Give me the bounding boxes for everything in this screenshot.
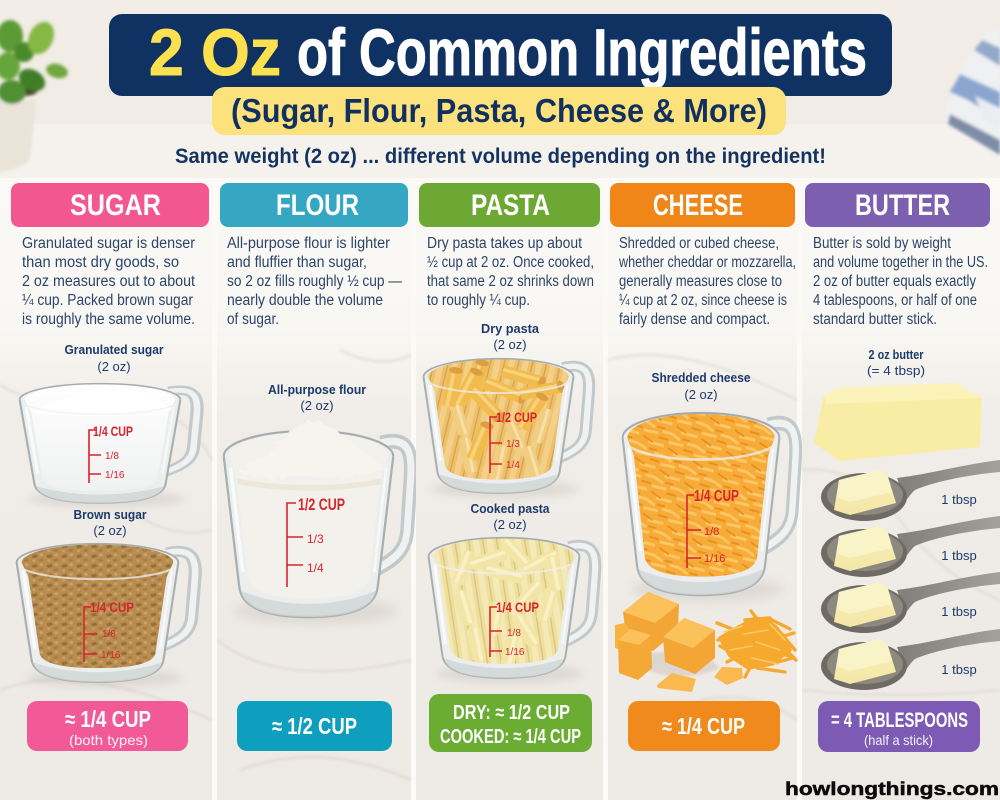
dry pasta cup: [422, 358, 589, 498]
shredded cheese label: (2 oz): [684, 387, 718, 402]
spoon 2: [821, 516, 1000, 577]
dry pasta cup: 1/3: [506, 439, 520, 450]
granulated sugar label: Granulated sugar: [64, 342, 164, 357]
brown sugar cup: [15, 543, 195, 688]
brown sugar cup: 1/8: [102, 629, 116, 640]
sugar description: [22, 235, 196, 328]
flour label: (2 oz): [300, 398, 334, 413]
panel: sugar: [0, 180, 212, 800]
shredded cheese pile: [717, 611, 796, 677]
shredded cheese cup: 1/4 CUP: [694, 488, 739, 505]
flour description: nearly double the volume: [227, 292, 383, 309]
flour cup: 1/2 CUP: [298, 495, 345, 514]
cooked pasta label: Cooked pasta: [470, 501, 550, 516]
sugar description: is roughly the same volume.: [22, 311, 195, 328]
spoon 1: [821, 460, 1000, 521]
flour cup: 1/4: [307, 561, 324, 575]
cooked pasta cup: [427, 536, 595, 684]
pasta header: [419, 183, 600, 227]
flour result badge: [237, 701, 392, 751]
cheese description: generally measures close to: [619, 273, 782, 290]
sugar description: than most dry goods, so: [22, 254, 179, 271]
sugar header: [11, 183, 209, 227]
brown sugar label: (2 oz): [93, 523, 127, 538]
panel: pasta: [416, 180, 603, 800]
cheese description: [618, 235, 796, 328]
pasta header: PASTA: [471, 189, 550, 222]
cheese description: ¼ cup at 2 oz, since cheese is: [619, 292, 787, 309]
dry pasta cup: 1/2 CUP: [496, 409, 537, 425]
butter label: 2 oz butter: [868, 347, 924, 362]
flour header: [220, 183, 408, 227]
sugar result badge: ≈ 1/4 CUP: [65, 706, 151, 732]
pasta result badge: [429, 694, 592, 752]
sugar description: ¼ cup. Packed brown sugar: [22, 292, 193, 309]
pasta description: Dry pasta takes up about: [427, 235, 583, 252]
granulated sugar label: [64, 342, 164, 374]
spoon 1: 1 tbsp: [941, 492, 977, 507]
brown sugar cup: 1/16: [101, 650, 121, 661]
cheese result badge: ≈ 1/4 CUP: [662, 713, 745, 739]
panel: cheese: [608, 180, 797, 800]
granulated sugar cup: 1/4 CUP: [93, 423, 133, 439]
flour description: [227, 235, 402, 328]
dry pasta label: (2 oz): [493, 337, 527, 352]
brown sugar label: [74, 507, 146, 538]
spoon 4: 1 tbsp: [941, 662, 977, 677]
cheese result badge: [628, 701, 780, 751]
watermark: howlongthings.com: [785, 779, 999, 799]
panel: butter: [802, 180, 1000, 800]
cooked pasta cup: 1/8: [507, 628, 521, 639]
flour description: and fluffier than sugar,: [227, 254, 367, 271]
flour cup: 1/3: [307, 532, 324, 546]
dry pasta label: Dry pasta: [481, 321, 540, 336]
cheese description: fairly dense and compact.: [619, 311, 770, 328]
cheese cubes and shreds: [615, 592, 796, 692]
butter label: (= 4 tbsp): [867, 363, 925, 378]
pasta result badge: DRY: ≈ 1/2 CUP: [453, 702, 570, 724]
shredded cheese cup: 1/16: [704, 553, 725, 565]
butter label: [867, 347, 925, 378]
butter result badge: (half a stick): [864, 732, 933, 748]
panel: flour: [217, 180, 411, 800]
towel (blurred): [945, 28, 1000, 155]
dry pasta cup: 1/4: [506, 460, 520, 471]
butter result badge: [818, 701, 980, 752]
cooked pasta label: (2 oz): [493, 517, 527, 532]
granulated sugar cup: 1/16: [105, 470, 125, 481]
granulated sugar label: (2 oz): [97, 359, 131, 374]
spoon 3: [821, 572, 1000, 633]
butter description: standard butter stick.: [813, 311, 937, 328]
butter header: [805, 183, 990, 227]
sugar result badge: [27, 701, 188, 751]
plant and pot (blurred): [0, 18, 69, 172]
tagline: Same weight (2 oz) ... different volume depending on the ingredient!: [175, 145, 826, 168]
shredded cheese cup: 1/8: [704, 526, 719, 538]
butter description: [813, 235, 988, 328]
cooked pasta cup: 1/16: [505, 647, 525, 658]
cheese header: CHEESE: [653, 189, 743, 222]
pasta result badge: COOKED: ≈ 1/4 CUP: [440, 726, 581, 748]
pasta description: to roughly ¼ cup.: [427, 292, 530, 309]
cooked pasta cup: 1/4 CUP: [496, 599, 539, 615]
sugar description: 2 oz measures out to about: [22, 273, 196, 290]
sugar header: SUGAR: [70, 189, 161, 222]
flour description: of sugar.: [227, 311, 279, 328]
granulated sugar cup: [18, 383, 197, 508]
sugar description: Granulated sugar is denser: [22, 235, 195, 252]
flour description: so 2 oz fills roughly ½ cup —: [227, 273, 402, 290]
brown sugar label: Brown sugar: [74, 507, 146, 522]
butter description: Butter is sold by weight: [813, 235, 952, 252]
butter header: BUTTER: [855, 189, 950, 222]
cheese header: [610, 183, 795, 227]
flour cup: [222, 421, 411, 624]
pasta description: that same 2 oz shrinks down: [427, 273, 594, 290]
title banner: [109, 14, 892, 96]
subtitle pill: (Sugar, Flour, Pasta, Cheese & More): [231, 92, 767, 129]
pasta description: [427, 235, 594, 309]
cooked pasta label: [470, 501, 550, 532]
pasta description: ½ cup at 2 oz. Once cooked,: [427, 254, 594, 271]
spoon 3: 1 tbsp: [941, 604, 977, 619]
shredded cheese label: [652, 370, 750, 402]
granulated sugar cup: 1/8: [105, 451, 119, 462]
shredded cheese cup: [621, 412, 796, 602]
flour label: [268, 382, 366, 413]
shredded cheese label: Shredded cheese: [652, 370, 750, 385]
sugar result badge: (both types): [69, 732, 148, 748]
brown sugar cup: 1/4 CUP: [90, 599, 134, 615]
spoon 4: [821, 629, 1000, 690]
cheese description: Shredded or cubed cheese,: [619, 235, 779, 252]
flour label: All-purpose flour: [268, 382, 366, 397]
flour header: FLOUR: [276, 189, 359, 222]
dry pasta label: [481, 321, 540, 352]
butter stick: [814, 383, 982, 461]
flour description: All-purpose flour is lighter: [227, 235, 390, 252]
cheese description: whether cheddar or mozzarella,: [618, 254, 796, 271]
title text: 2 Oz: [149, 15, 281, 89]
flour result badge: ≈ 1/2 CUP: [272, 713, 357, 739]
spoon 2: 1 tbsp: [941, 548, 977, 563]
